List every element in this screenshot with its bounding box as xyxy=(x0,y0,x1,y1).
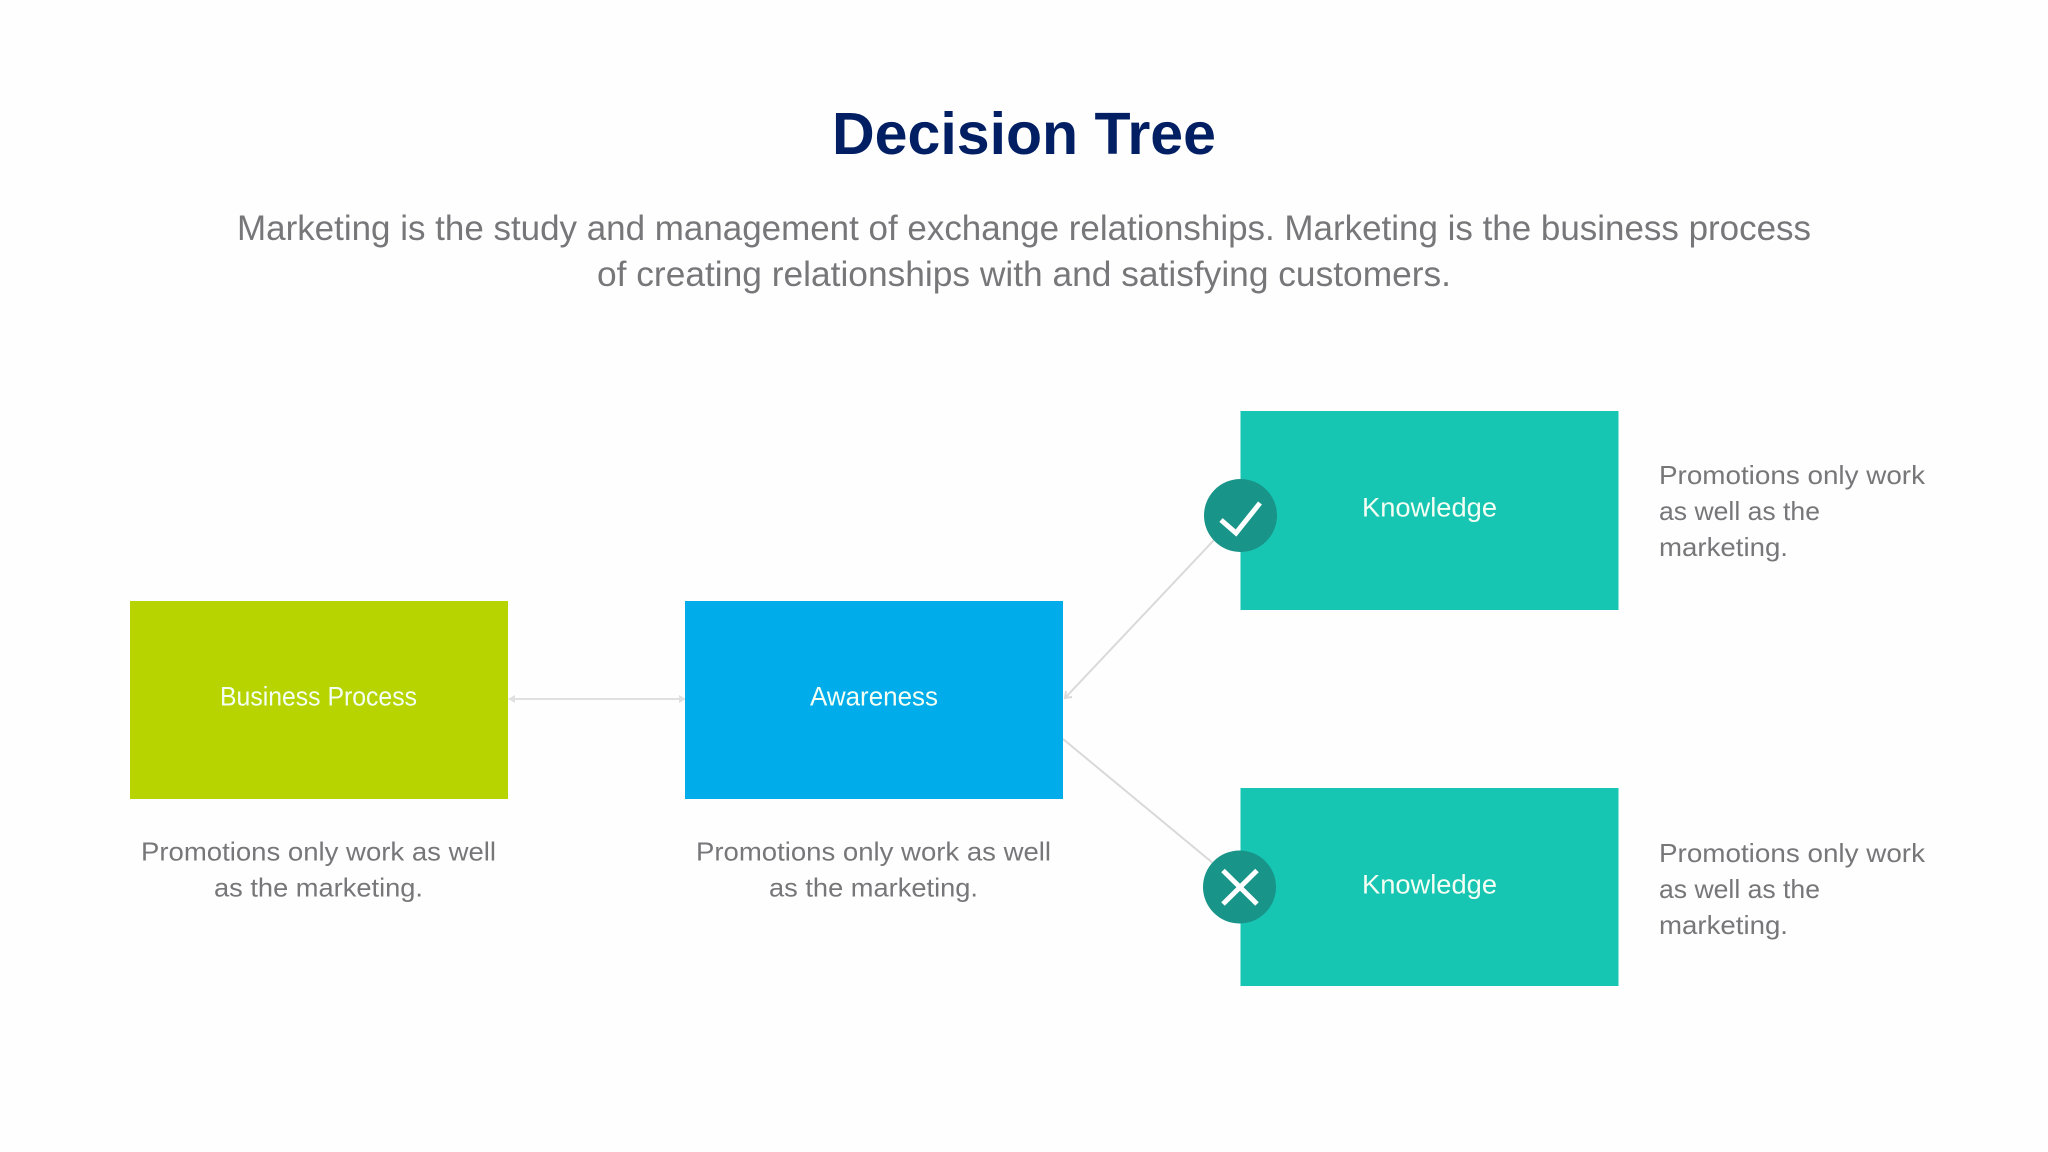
box: Knowledge top: Knowledge xyxy=(1362,492,1497,522)
text: top Knowledge description: marketing. xyxy=(1659,532,1788,562)
arrow: Awareness to top Knowledge xyxy=(1065,540,1214,698)
text: Awareness description: Promotions only work as well xyxy=(696,836,1051,866)
subtitle text xyxy=(237,208,1811,294)
box: Knowledge bottom: Knowledge xyxy=(1362,870,1497,900)
subtitle text: Marketing is the study and management of exchange relationships. Marketing is the business process xyxy=(237,208,1811,248)
box: Awareness: Awareness xyxy=(810,682,938,712)
text: Business Process description: as the marketing. xyxy=(214,872,423,902)
arrow: between Business Process and Awareness xyxy=(508,695,686,703)
text: bottom Knowledge description: Promotions only work xyxy=(1659,838,1926,868)
text: bottom Knowledge description: marketing. xyxy=(1659,910,1788,940)
text: bottom Knowledge description: as well as the xyxy=(1659,874,1820,904)
box: Knowledge top xyxy=(1240,411,1618,610)
box: Business Process: Business Process xyxy=(220,682,417,712)
text: bottom Knowledge description xyxy=(1659,838,1926,940)
text: Awareness description xyxy=(696,836,1051,902)
box: Knowledge bottom xyxy=(1240,788,1618,986)
text: Business Process description: Promotions only work as well xyxy=(141,836,496,866)
text: top Knowledge description xyxy=(1659,460,1926,562)
icon: cross badge xyxy=(1203,850,1276,924)
box: Awareness xyxy=(685,601,1063,799)
title: Decision Tree xyxy=(832,101,1216,167)
connector: Awareness to bottom Knowledge xyxy=(1063,739,1214,864)
box: Business Process xyxy=(130,601,508,799)
subtitle text: of creating relationships with and satisfying customers. xyxy=(597,254,1451,294)
icon: check mark badge xyxy=(1204,479,1277,552)
text: Business Process description xyxy=(141,836,496,902)
text: top Knowledge description: Promotions only work xyxy=(1659,460,1926,490)
text: top Knowledge description: as well as the xyxy=(1659,496,1820,526)
text: Awareness description: as the marketing. xyxy=(769,872,978,902)
